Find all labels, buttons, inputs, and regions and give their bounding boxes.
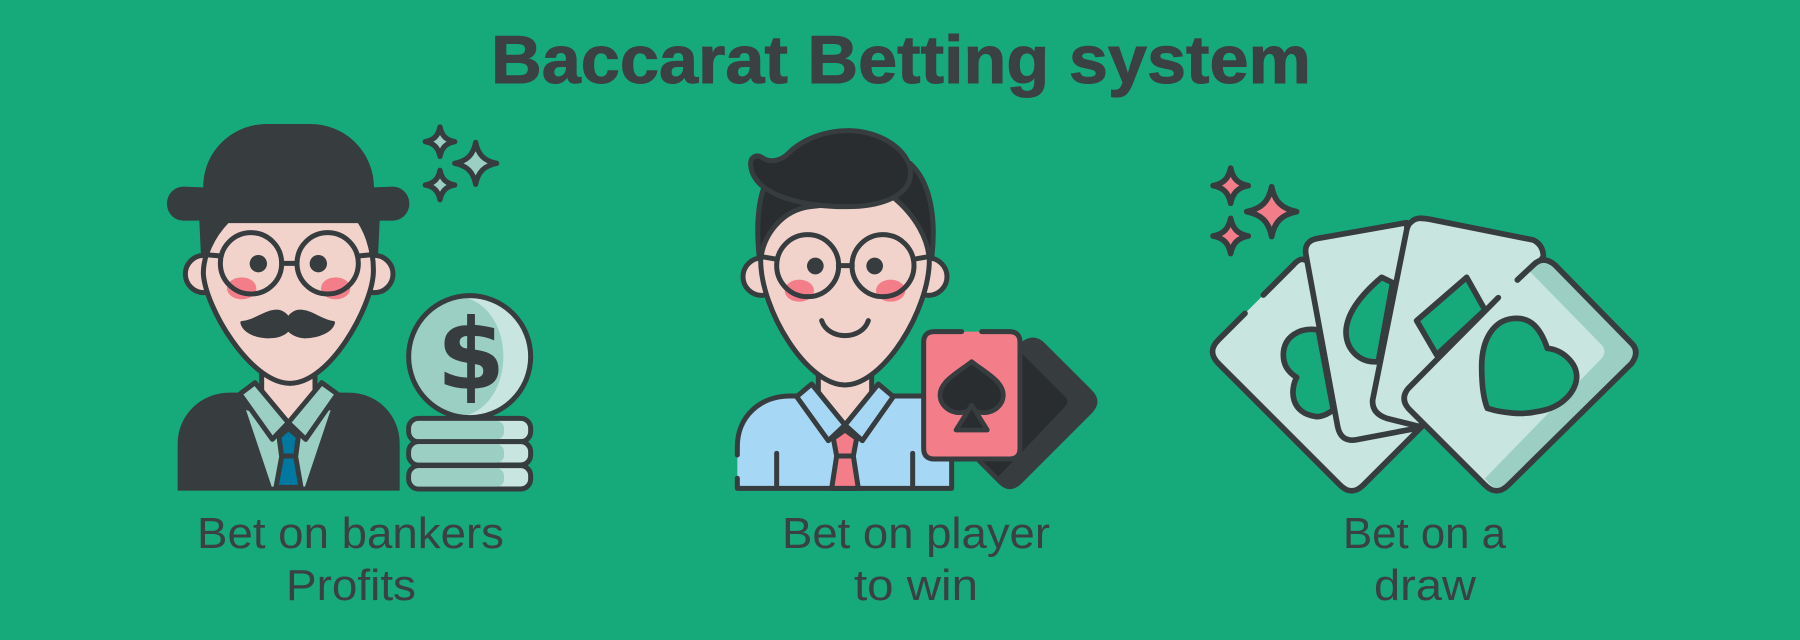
bowler hat <box>167 124 409 221</box>
caption: bankers: Bet on bankers <box>197 509 504 558</box>
moustache <box>242 311 333 337</box>
hair back <box>758 163 933 258</box>
ear right <box>356 255 393 293</box>
caption: player: to win <box>854 561 978 610</box>
icon: player with card <box>737 131 1097 489</box>
cheek left <box>785 280 814 302</box>
neck <box>262 372 315 423</box>
eye right <box>310 255 327 272</box>
collar right <box>288 383 337 439</box>
back card <box>977 337 1097 489</box>
caption: draw <box>1343 509 1507 610</box>
caption: player: Bet on player <box>782 509 1050 558</box>
collar left <box>797 384 845 441</box>
player shirt <box>737 396 952 488</box>
face <box>203 221 373 383</box>
glasses <box>205 233 372 294</box>
shirt outline <box>737 396 952 488</box>
heart <box>1482 318 1577 413</box>
card: clubs <box>1212 259 1423 491</box>
coin: $ <box>437 299 505 413</box>
caption: draw: draw <box>1374 561 1476 610</box>
sparkles <box>1213 168 1297 254</box>
icon: banker with coins <box>167 124 531 490</box>
caption: draw: Bet on a <box>1343 509 1507 558</box>
cheek right <box>321 277 350 299</box>
card: diamonds <box>1373 218 1543 427</box>
caption: bankers <box>197 509 504 610</box>
face <box>761 197 929 385</box>
glasses <box>762 235 928 297</box>
coin stack <box>409 418 531 489</box>
hair behind head <box>199 213 380 257</box>
neck <box>818 375 872 425</box>
hair front <box>751 131 911 207</box>
eye right <box>866 258 883 274</box>
ear left <box>743 258 780 295</box>
icon: fan of cards <box>1212 168 1636 491</box>
eye left <box>807 258 824 274</box>
caption: bankers: Profits <box>286 561 416 610</box>
ear right <box>910 258 947 295</box>
cheek left <box>227 277 256 299</box>
sparkles <box>425 127 497 200</box>
caption: player <box>782 509 1050 610</box>
title: Baccarat Betting system <box>491 22 1311 98</box>
spade <box>940 362 1003 430</box>
ear left <box>185 255 223 293</box>
card: spades <box>1306 223 1417 440</box>
red card <box>924 332 1020 459</box>
eye left <box>250 255 267 272</box>
collar right <box>845 384 893 441</box>
smile <box>822 321 868 336</box>
banker body and suit <box>178 393 399 490</box>
card: hearts <box>1404 259 1636 491</box>
cheek right <box>876 280 905 302</box>
necktie <box>832 430 858 488</box>
shirt <box>246 410 331 487</box>
collar left <box>240 383 288 439</box>
necktie <box>276 428 301 487</box>
coin <box>409 296 531 418</box>
